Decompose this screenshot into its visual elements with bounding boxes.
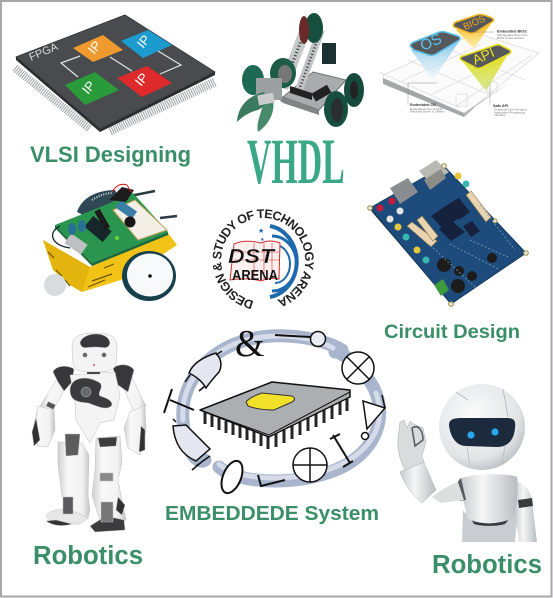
API funnel [460, 44, 511, 91]
shoulders [53, 366, 74, 391]
heading: Robotics left: Robotics [33, 542, 143, 570]
callout labels: Interface [494, 113, 506, 117]
OS funnel [410, 30, 460, 80]
callout labels: Safe API [493, 104, 508, 108]
icon: VEX robot with claw [237, 13, 364, 132]
torso [70, 372, 120, 443]
arrows between IP blocks [61, 51, 181, 77]
green IP block: IP [79, 78, 98, 97]
API funnel: API [470, 44, 497, 68]
icon: white robot waving [398, 384, 537, 542]
BIOS funnel: BIOS [462, 13, 487, 33]
ball caster [44, 274, 66, 296]
heading: VLSI Designing: VLSI Designing [30, 142, 191, 167]
orange IP block [73, 35, 123, 62]
connectors [390, 160, 449, 204]
legs [58, 442, 90, 520]
antenna whiskers [130, 191, 177, 218]
callout labels: Embedded OS [410, 103, 436, 107]
title: VHDL: VHDL [247, 127, 345, 198]
callout labels: Manageable Boot Core [497, 33, 528, 37]
callout labels: Windows Driver & Utilities [410, 110, 445, 114]
blue IP block: IP [134, 32, 153, 51]
red IP block: IP [132, 70, 151, 89]
callout labels: BIOS Customization [497, 36, 524, 40]
logic gate symbols [164, 332, 385, 496]
wheel [122, 251, 176, 301]
icon: FPGA chip: FPGA [27, 41, 60, 64]
logo: Design and Study of Technology Arena [212, 209, 314, 310]
icon: circuit board [368, 160, 528, 307]
callout labels: Embedded BIOS [497, 30, 527, 34]
servo arc [77, 190, 120, 216]
heading: EMBEDDEDE System: EMBEDDEDE System [165, 503, 379, 525]
callout labels [410, 30, 528, 117]
chips and connector [84, 216, 112, 242]
callout labels: Graphical User Interface [494, 108, 527, 112]
ring band [183, 336, 380, 481]
blue IP block [121, 30, 172, 58]
circular logo text: DESIGN & STUDY OF TECHNOLOGY ARENA [212, 209, 314, 310]
blue arcs [270, 226, 297, 297]
head [72, 333, 117, 372]
red IP block [117, 66, 172, 97]
icon: NAO humanoid robot [32, 333, 146, 532]
icon: FPGA chip [15, 15, 215, 132]
green circuit board [55, 193, 168, 263]
stars [258, 227, 265, 243]
breadboard [113, 200, 167, 240]
chip body [200, 382, 350, 437]
yellow chassis [43, 233, 177, 292]
yellow die [246, 393, 294, 410]
OS funnel: OS [418, 30, 444, 55]
BIOS funnel [453, 13, 494, 49]
ampersand: & [235, 323, 265, 365]
logo: Design and Study of Technology Arena: ARENA [232, 267, 278, 284]
heading: Robotics right: Robotics [432, 551, 542, 579]
icon: embedded OS BIOS API diagram [379, 13, 539, 117]
icon: yellow wheeled robot kit [43, 184, 177, 301]
logo monogram: DST [228, 246, 276, 268]
green IP block [65, 72, 119, 105]
callout labels: Embedded Linux & QNX [410, 107, 443, 111]
red book with building [230, 241, 280, 281]
arms [40, 374, 70, 412]
stars: ★ [258, 227, 264, 235]
stars: ★ [260, 237, 265, 243]
callout labels: Application Programing [494, 110, 525, 114]
heading: Circuit Design: Circuit Design [384, 321, 520, 343]
chip pins [205, 399, 347, 449]
icon: embedded system chip with logic gates ring [164, 323, 385, 496]
orange IP block: IP [85, 38, 104, 57]
